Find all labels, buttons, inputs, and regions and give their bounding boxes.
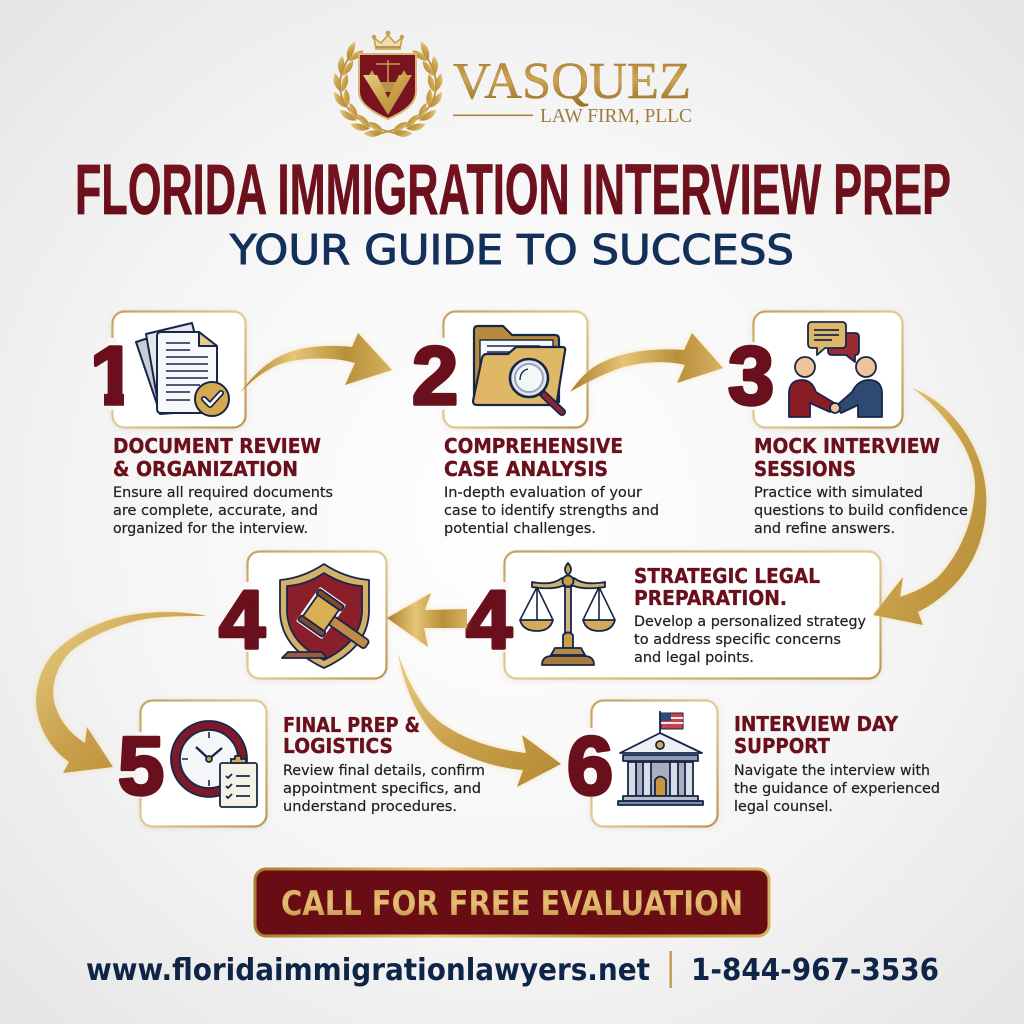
- icon: folder with magnifier: [473, 326, 565, 412]
- text: step 2: case to identify strengths and: [444, 503, 659, 519]
- icon: documents: [136, 323, 229, 416]
- text: step 4: Develop a personalized strategy: [634, 614, 866, 630]
- number 4: 4: [466, 573, 512, 666]
- text: step 1: Ensure all required documents: [113, 485, 333, 501]
- icon: crown: [373, 31, 403, 49]
- text: step 2: In-depth evaluation of your: [444, 485, 642, 501]
- icon: scales of justice: [520, 563, 615, 665]
- panel: step 4 shield and gavel: [219, 552, 386, 678]
- arrow: left panel to step 5: [36, 612, 207, 773]
- text: step 6: the guidance of experienced: [734, 781, 940, 797]
- footer website: www.floridaimmigrationlawyers.net: [86, 953, 650, 988]
- number 6: 6: [567, 719, 613, 812]
- text: step 1: organized for the interview.: [113, 521, 308, 537]
- text: step 2: CASE ANALYSIS: [444, 457, 608, 481]
- text: step 5: FINAL PREP &: [283, 713, 420, 737]
- subtitle: YOUR GUIDE TO SUCCESS: [229, 226, 794, 274]
- text: step 6: INTERVIEW DAY: [734, 712, 898, 736]
- icon: laurel wreath: [333, 41, 443, 140]
- text: step 1: [113, 434, 333, 537]
- arrow: left panel to step 6: [398, 653, 561, 787]
- text: step 5: understand procedures.: [283, 799, 457, 815]
- text: step 3: questions to build confidence: [754, 503, 968, 519]
- icon: courthouse with flag: [618, 711, 703, 805]
- logo wordmark: VASQUEZ: [453, 53, 691, 110]
- number 2: 2: [412, 329, 458, 422]
- panel: step 1 document review: [90, 312, 246, 428]
- icon: people shaking hands: [789, 322, 882, 417]
- arrow: step 4 to left panel: [387, 593, 467, 647]
- text: step 5: LOGISTICS: [283, 734, 393, 758]
- arrow: step 3 to 4: [873, 388, 986, 625]
- number 5: 5: [118, 719, 164, 812]
- panel: step 4 strategic legal preparation: [466, 552, 880, 678]
- text: step 6: Navigate the interview with: [734, 763, 930, 779]
- number 3: 3: [728, 329, 774, 422]
- text: step 4: STRATEGIC LEGAL: [634, 564, 820, 588]
- text: step 4: [634, 564, 866, 666]
- panel: step 3 mock interview: [728, 312, 902, 428]
- logo subtitle: LAW FIRM, PLLC: [540, 105, 692, 127]
- logo: Vasquez Law Firm: [333, 31, 692, 140]
- icon: logo shield: [359, 54, 416, 119]
- number 1: 1: [90, 329, 136, 422]
- arrow: step 2 to 3: [570, 333, 723, 392]
- text: step 4: and legal points.: [634, 650, 754, 666]
- text: step 6: legal counsel.: [734, 799, 833, 815]
- text: step 5: [283, 713, 485, 815]
- number 4: 4: [219, 573, 265, 666]
- icon: clock and clipboard: [171, 721, 257, 807]
- arrow: step 1 to 2: [240, 333, 392, 393]
- panel: step 5 final prep: [118, 700, 266, 826]
- text: step 2: COMPREHENSIVE: [444, 434, 623, 458]
- text: step 4: PREPARATION.: [634, 586, 787, 610]
- footer phone: 1-844-967-3536: [691, 953, 939, 988]
- text: step 4: to address specific concerns: [634, 632, 841, 648]
- text: step 1: are complete, accurate, and: [113, 503, 318, 519]
- text: step 1: DOCUMENT REVIEW: [113, 434, 321, 458]
- text: step 2: [444, 434, 659, 537]
- panel: step 2 case analysis: [412, 312, 588, 428]
- call to action button: [255, 869, 769, 936]
- text: step 5: appointment specifics, and: [283, 781, 481, 797]
- text: step 3: Practice with simulated: [754, 485, 923, 501]
- text: step 3: SESSIONS: [754, 457, 856, 481]
- icon: shield with gavel: [280, 564, 379, 668]
- text: step 2: potential challenges.: [444, 521, 596, 537]
- text: step 1: & ORGANIZATION: [113, 457, 298, 481]
- text: step 6: SUPPORT: [734, 734, 830, 758]
- text: step 6: [734, 712, 940, 815]
- text: step 5: Review final details, confirm: [283, 763, 485, 779]
- panel: step 6 interview day: [567, 700, 718, 826]
- text: step 3: [754, 434, 968, 537]
- text: step 3: and refine answers.: [754, 521, 895, 537]
- text: step 3: MOCK INTERVIEW: [754, 434, 940, 458]
- call to action button: CALL FOR FREE EVALUATION: [281, 884, 743, 924]
